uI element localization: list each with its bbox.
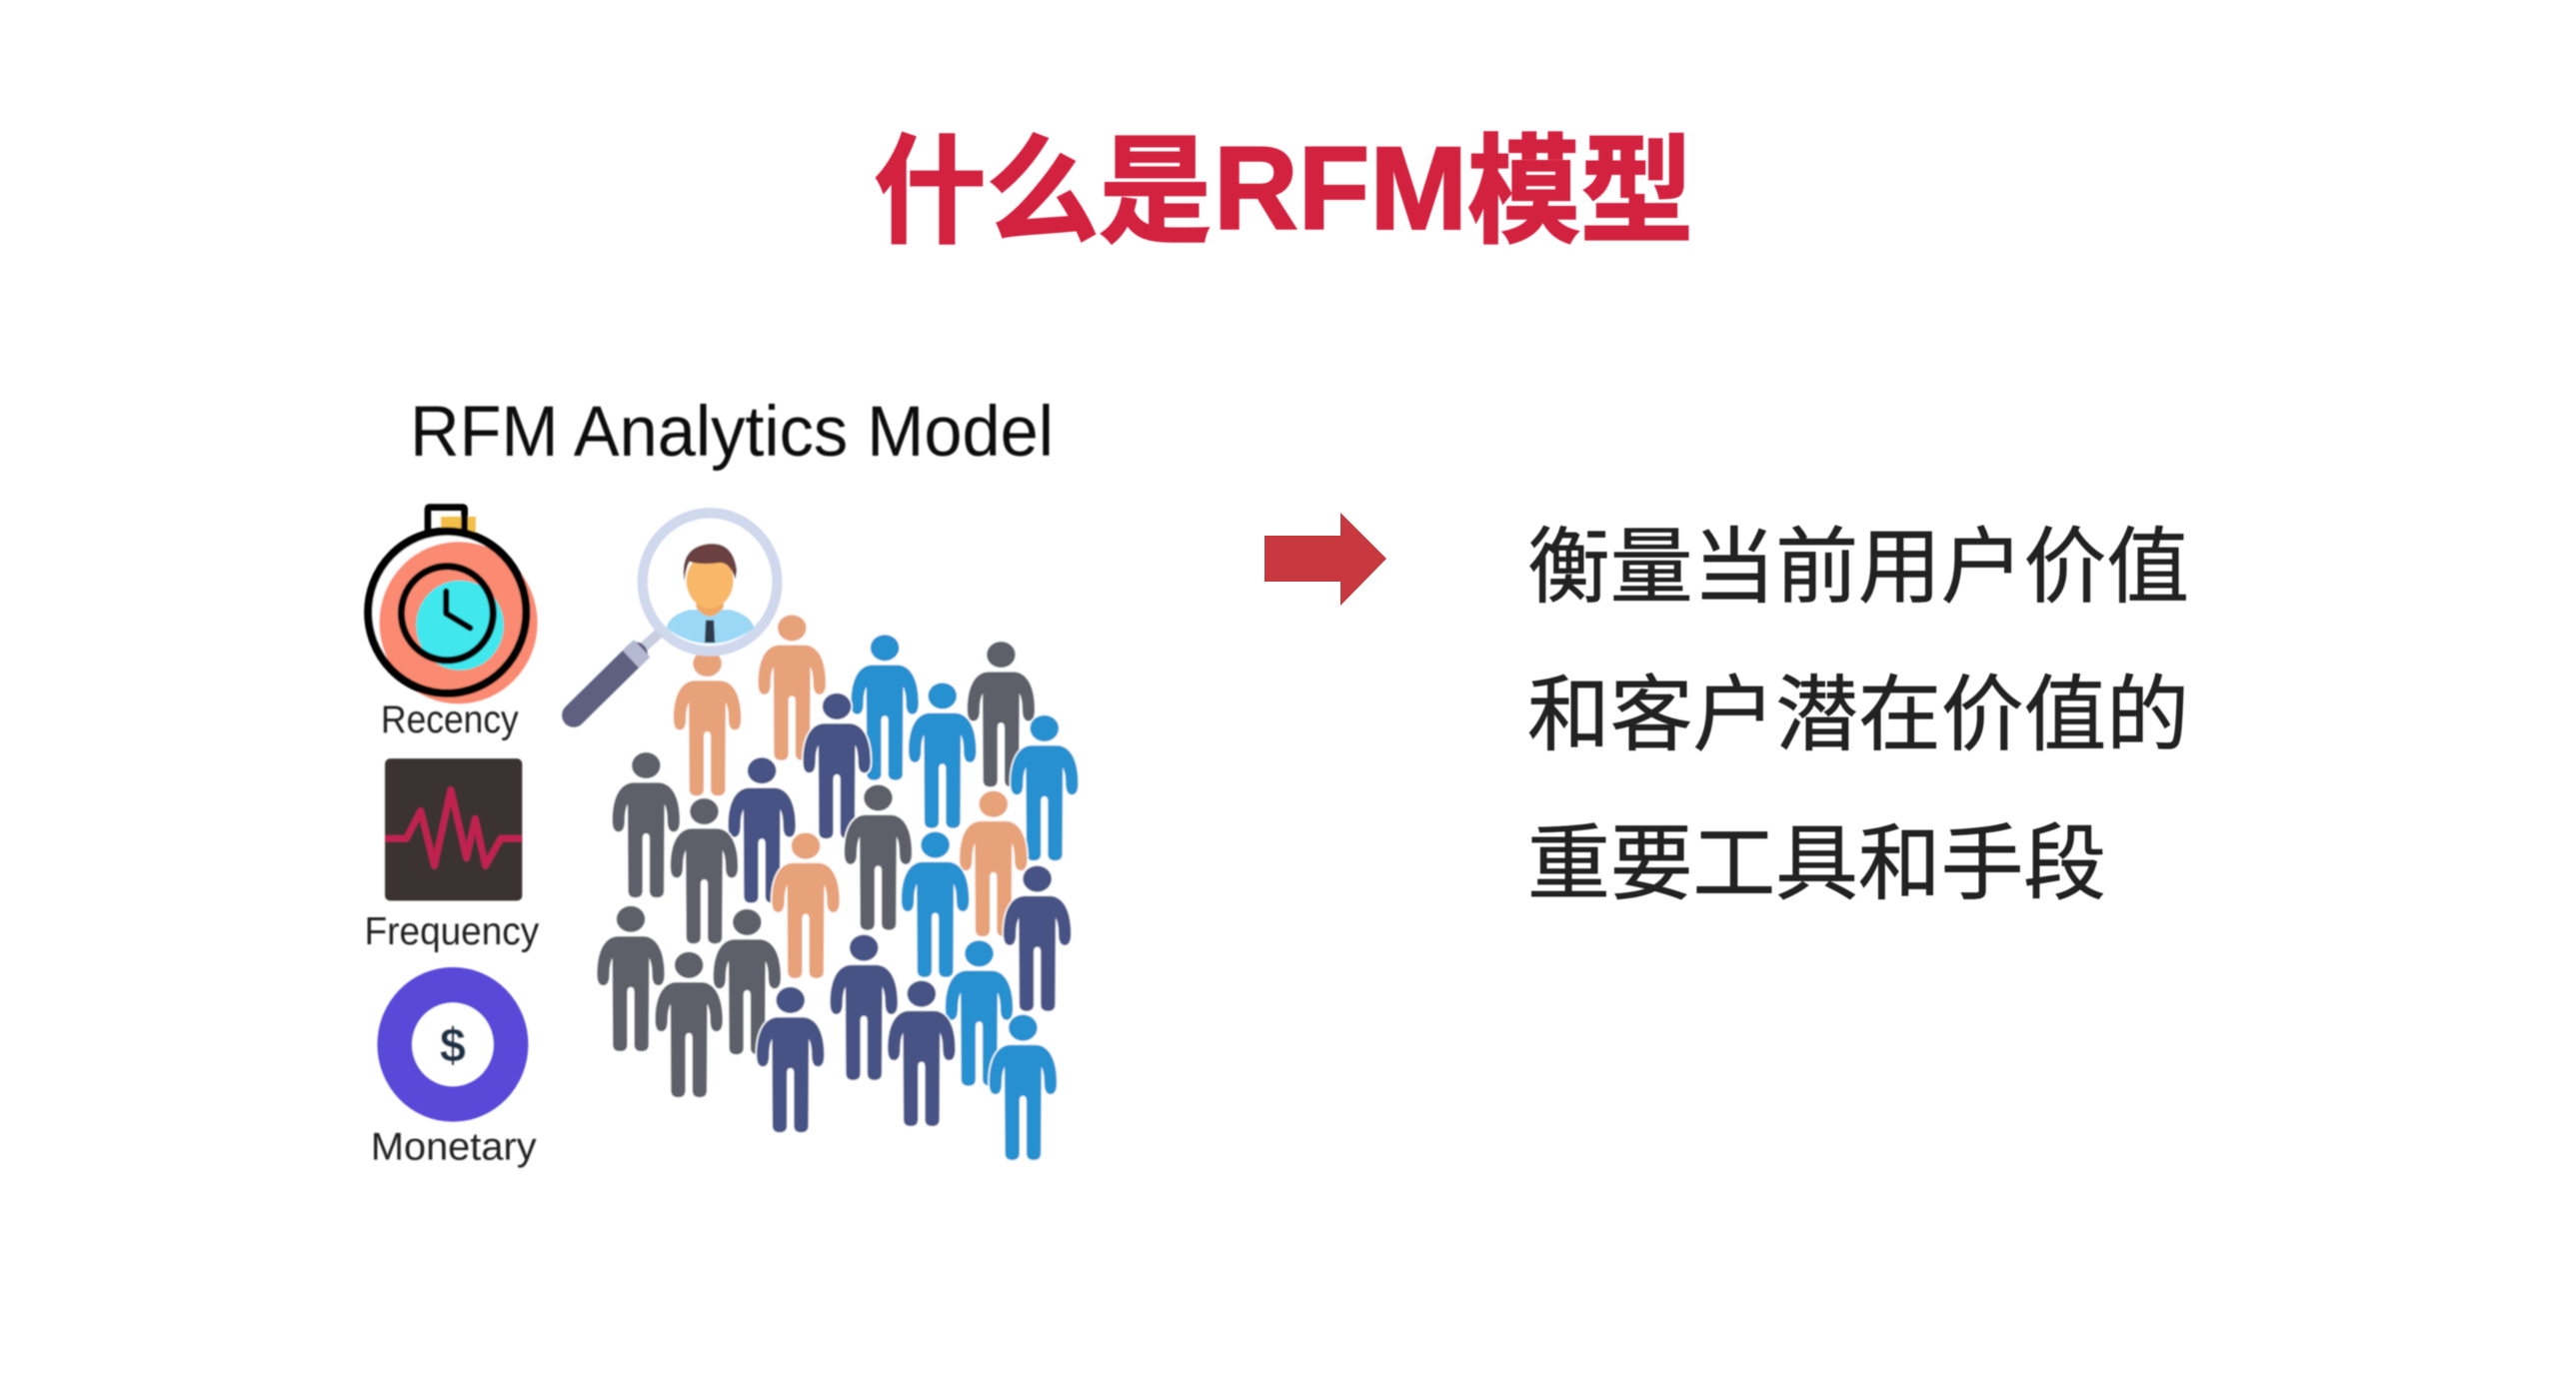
title: 模型	[1467, 96, 1693, 267]
label: Frequency: Frequency	[365, 909, 540, 953]
label: Recency: Recency	[381, 699, 520, 741]
icon: magnifying glass with customer	[574, 513, 777, 715]
title: 什么是	[874, 96, 1212, 267]
illustration heading: RFM Analytics Model	[410, 391, 1054, 471]
icon: stopwatch	[368, 508, 538, 703]
label: Monetary: Monetary	[371, 1125, 538, 1168]
icon: monetary coin: $	[440, 1019, 466, 1073]
title: RFM	[1214, 123, 1467, 255]
text block: definition: 衡量当前用户价值	[1527, 500, 2189, 620]
text block: definition: 和客户潜在价值的	[1527, 648, 2189, 767]
text block: definition: 重要工具和手段	[1527, 796, 2106, 916]
icon: monetary coin	[377, 967, 528, 1122]
crowd of people	[597, 615, 1078, 1160]
panel: RFM analytics model illustration	[365, 391, 1078, 1168]
icon: frequency monitor	[385, 758, 522, 900]
text block: definition	[1527, 500, 2189, 916]
title	[874, 96, 1693, 267]
arrow	[1265, 513, 1386, 606]
